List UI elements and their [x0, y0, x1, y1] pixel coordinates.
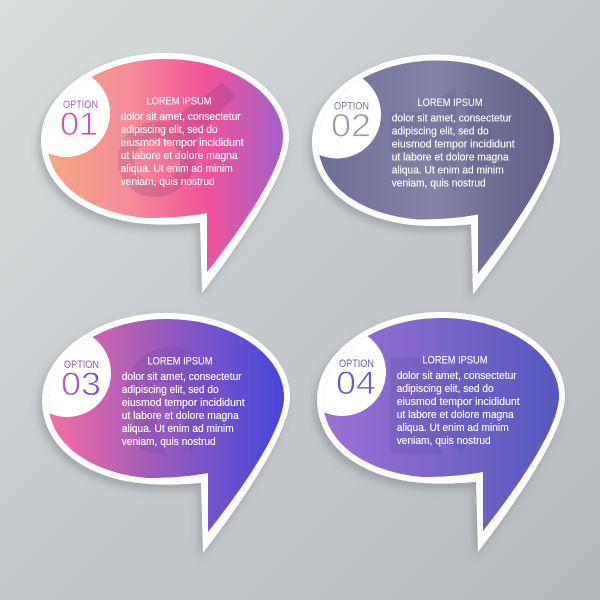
- watermark icon 03: [126, 347, 214, 455]
- body text 01: dolor sit amet, consectetur: [121, 111, 241, 123]
- heading 04: LOREM IPSUM: [422, 354, 488, 366]
- shadow 03: [39, 318, 287, 558]
- number 01: 01: [60, 106, 98, 142]
- body text 04: [397, 370, 520, 447]
- number 04: 04: [336, 365, 376, 401]
- body text 03: eiusmod tempor incididunt: [122, 397, 245, 409]
- body text 01: [121, 111, 244, 188]
- shadow 02: [309, 60, 557, 300]
- white outline 04: [317, 312, 565, 552]
- body text 02: eiusmod tempor incididunt: [392, 138, 515, 150]
- body text 04: eiusmod tempor incididunt: [397, 396, 520, 408]
- gradient fill 01: [47, 59, 283, 272]
- body text 02: aliqua. Ut enim ad minim: [392, 164, 504, 176]
- panel: option 02 bubble: [293, 54, 560, 300]
- body text 03: [122, 371, 245, 448]
- watermark icon 04: [390, 357, 491, 454]
- white outline 01: [41, 53, 289, 293]
- shadow 01: [38, 58, 286, 298]
- body text 03: ut labore et dolore magna: [122, 410, 239, 422]
- body text 04: ut labore et dolore magna: [397, 409, 514, 421]
- heading 03: LOREM IPSUM: [148, 356, 213, 368]
- number 02: 02: [331, 108, 371, 144]
- option label 02: OPTION: [334, 100, 369, 112]
- watermark icon 02: [391, 86, 492, 192]
- heading 01: LOREM IPSUM: [146, 96, 212, 108]
- number 03: 03: [61, 366, 101, 402]
- white outline 03: [42, 313, 290, 553]
- option label 03: OPTION: [64, 359, 99, 371]
- body text 04: dolor sit amet, consectetur: [397, 370, 517, 382]
- shadow 04: [314, 317, 562, 557]
- body text 03: veniam, quis nostrud: [122, 436, 216, 448]
- body text 02: dolor sit amet, consectetur: [392, 112, 512, 124]
- gradient fill 02: [318, 60, 554, 274]
- panel: option 04 bubble: [298, 312, 565, 557]
- body text 01: adipiscing elit, sed do: [121, 124, 218, 136]
- body text 04: aliqua. Ut enim ad minim: [397, 422, 509, 434]
- option label 01: OPTION: [63, 99, 98, 111]
- white circle 02: [318, 78, 381, 158]
- panel: option 03 bubble: [23, 313, 290, 558]
- body text 01: eiusmod tempor incididunt: [121, 137, 244, 149]
- gradient fill 04: [323, 318, 559, 531]
- body text 04: veniam, quis nostrud: [397, 435, 491, 447]
- gradient fill 03: [48, 319, 284, 532]
- body text 01: veniam, quis nostrud: [121, 176, 215, 188]
- body text 01: ut labore et dolore magna: [121, 150, 238, 162]
- option label 04: OPTION: [339, 358, 374, 370]
- body text 04: adipiscing elit, sed do: [397, 383, 494, 395]
- body text 02: adipiscing elit, sed do: [392, 126, 489, 138]
- body text 02: [392, 112, 515, 190]
- body text 02: veniam, quis nostrud: [392, 178, 486, 190]
- white outline 02: [312, 54, 560, 294]
- body text 03: aliqua. Ut enim ad minim: [122, 423, 234, 435]
- watermark icon 01: [118, 83, 236, 197]
- white circle 01: [47, 77, 110, 157]
- panel: option 01 bubble: [22, 53, 289, 298]
- body text 01: aliqua. Ut enim ad minim: [121, 163, 233, 175]
- body text 02: ut labore et dolore magna: [392, 152, 509, 164]
- heading 02: LOREM IPSUM: [418, 97, 483, 109]
- white circle 04: [323, 336, 386, 416]
- body text 03: dolor sit amet, consectetur: [122, 371, 242, 383]
- body text 03: adipiscing elit, sed do: [122, 384, 219, 396]
- white circle 03: [48, 337, 111, 417]
